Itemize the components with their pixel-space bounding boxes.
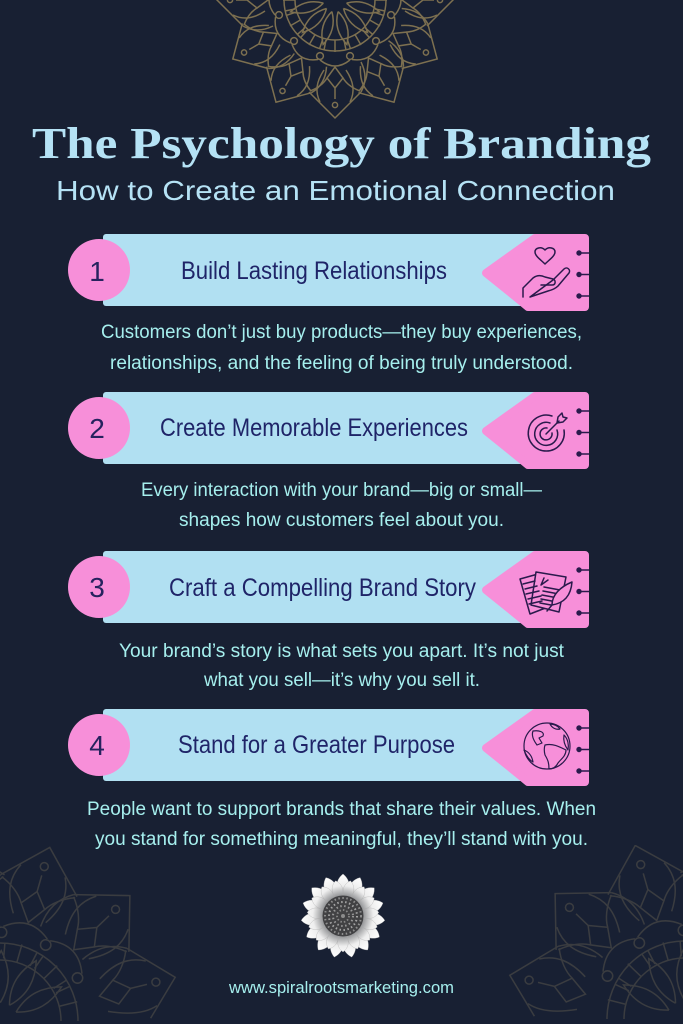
step 1 description: Customers don’t just buy products—they buy experiences, — [101, 322, 582, 343]
step 3 description: what you sell—it’s why you sell it. — [203, 670, 480, 691]
step 4 number: 4 — [89, 730, 105, 761]
mandala: top — [216, 0, 454, 119]
step 4 banner — [68, 709, 589, 782]
step 2 heading: Create Memorable Experiences — [160, 414, 468, 442]
step 4 heading: Stand for a Greater Purpose — [178, 731, 455, 759]
icon: hand holding heart — [523, 248, 570, 297]
step 1 heading: Build Lasting Relationships — [181, 257, 447, 285]
mandala: bottom right — [509, 845, 683, 1019]
step 2 number: 2 — [89, 413, 105, 444]
step 3 description: Your brand’s story is what sets you apart. It’s not just — [119, 641, 565, 662]
step 2 description: shapes how customers feel about you. — [179, 510, 504, 531]
step 2 banner — [68, 392, 589, 465]
step 4 description: you stand for something meaningful, they’ll stand with you. — [95, 829, 588, 850]
step 1 banner — [68, 234, 589, 307]
step 1 description — [101, 322, 582, 374]
step 3 heading: Craft a Compelling Brand Story — [169, 574, 476, 602]
icon: sunflower logo — [301, 874, 385, 958]
step 3 banner — [68, 551, 589, 624]
step 1 description: relationships, and the feeling of being truly understood. — [110, 353, 573, 374]
website url: www.spiralrootsmarketing.com — [228, 979, 454, 997]
step 2 description — [141, 480, 542, 531]
subtitle: How to Create an Emotional Connection — [56, 175, 615, 206]
step 2 description: Every interaction with your brand—big or small— — [141, 480, 542, 501]
mandala: bottom left — [0, 846, 176, 1021]
step 4 description: People want to support brands that share their values. When — [87, 799, 596, 820]
step 3 description — [119, 641, 565, 691]
icon: target with arrow — [528, 413, 567, 451]
step 1 number: 1 — [89, 256, 105, 287]
title: The Psychology of Branding — [32, 119, 651, 168]
step 3 number: 3 — [89, 572, 105, 603]
icon: documents and quill — [520, 572, 572, 614]
icon: globe — [524, 723, 570, 769]
step 4 description — [87, 799, 596, 850]
